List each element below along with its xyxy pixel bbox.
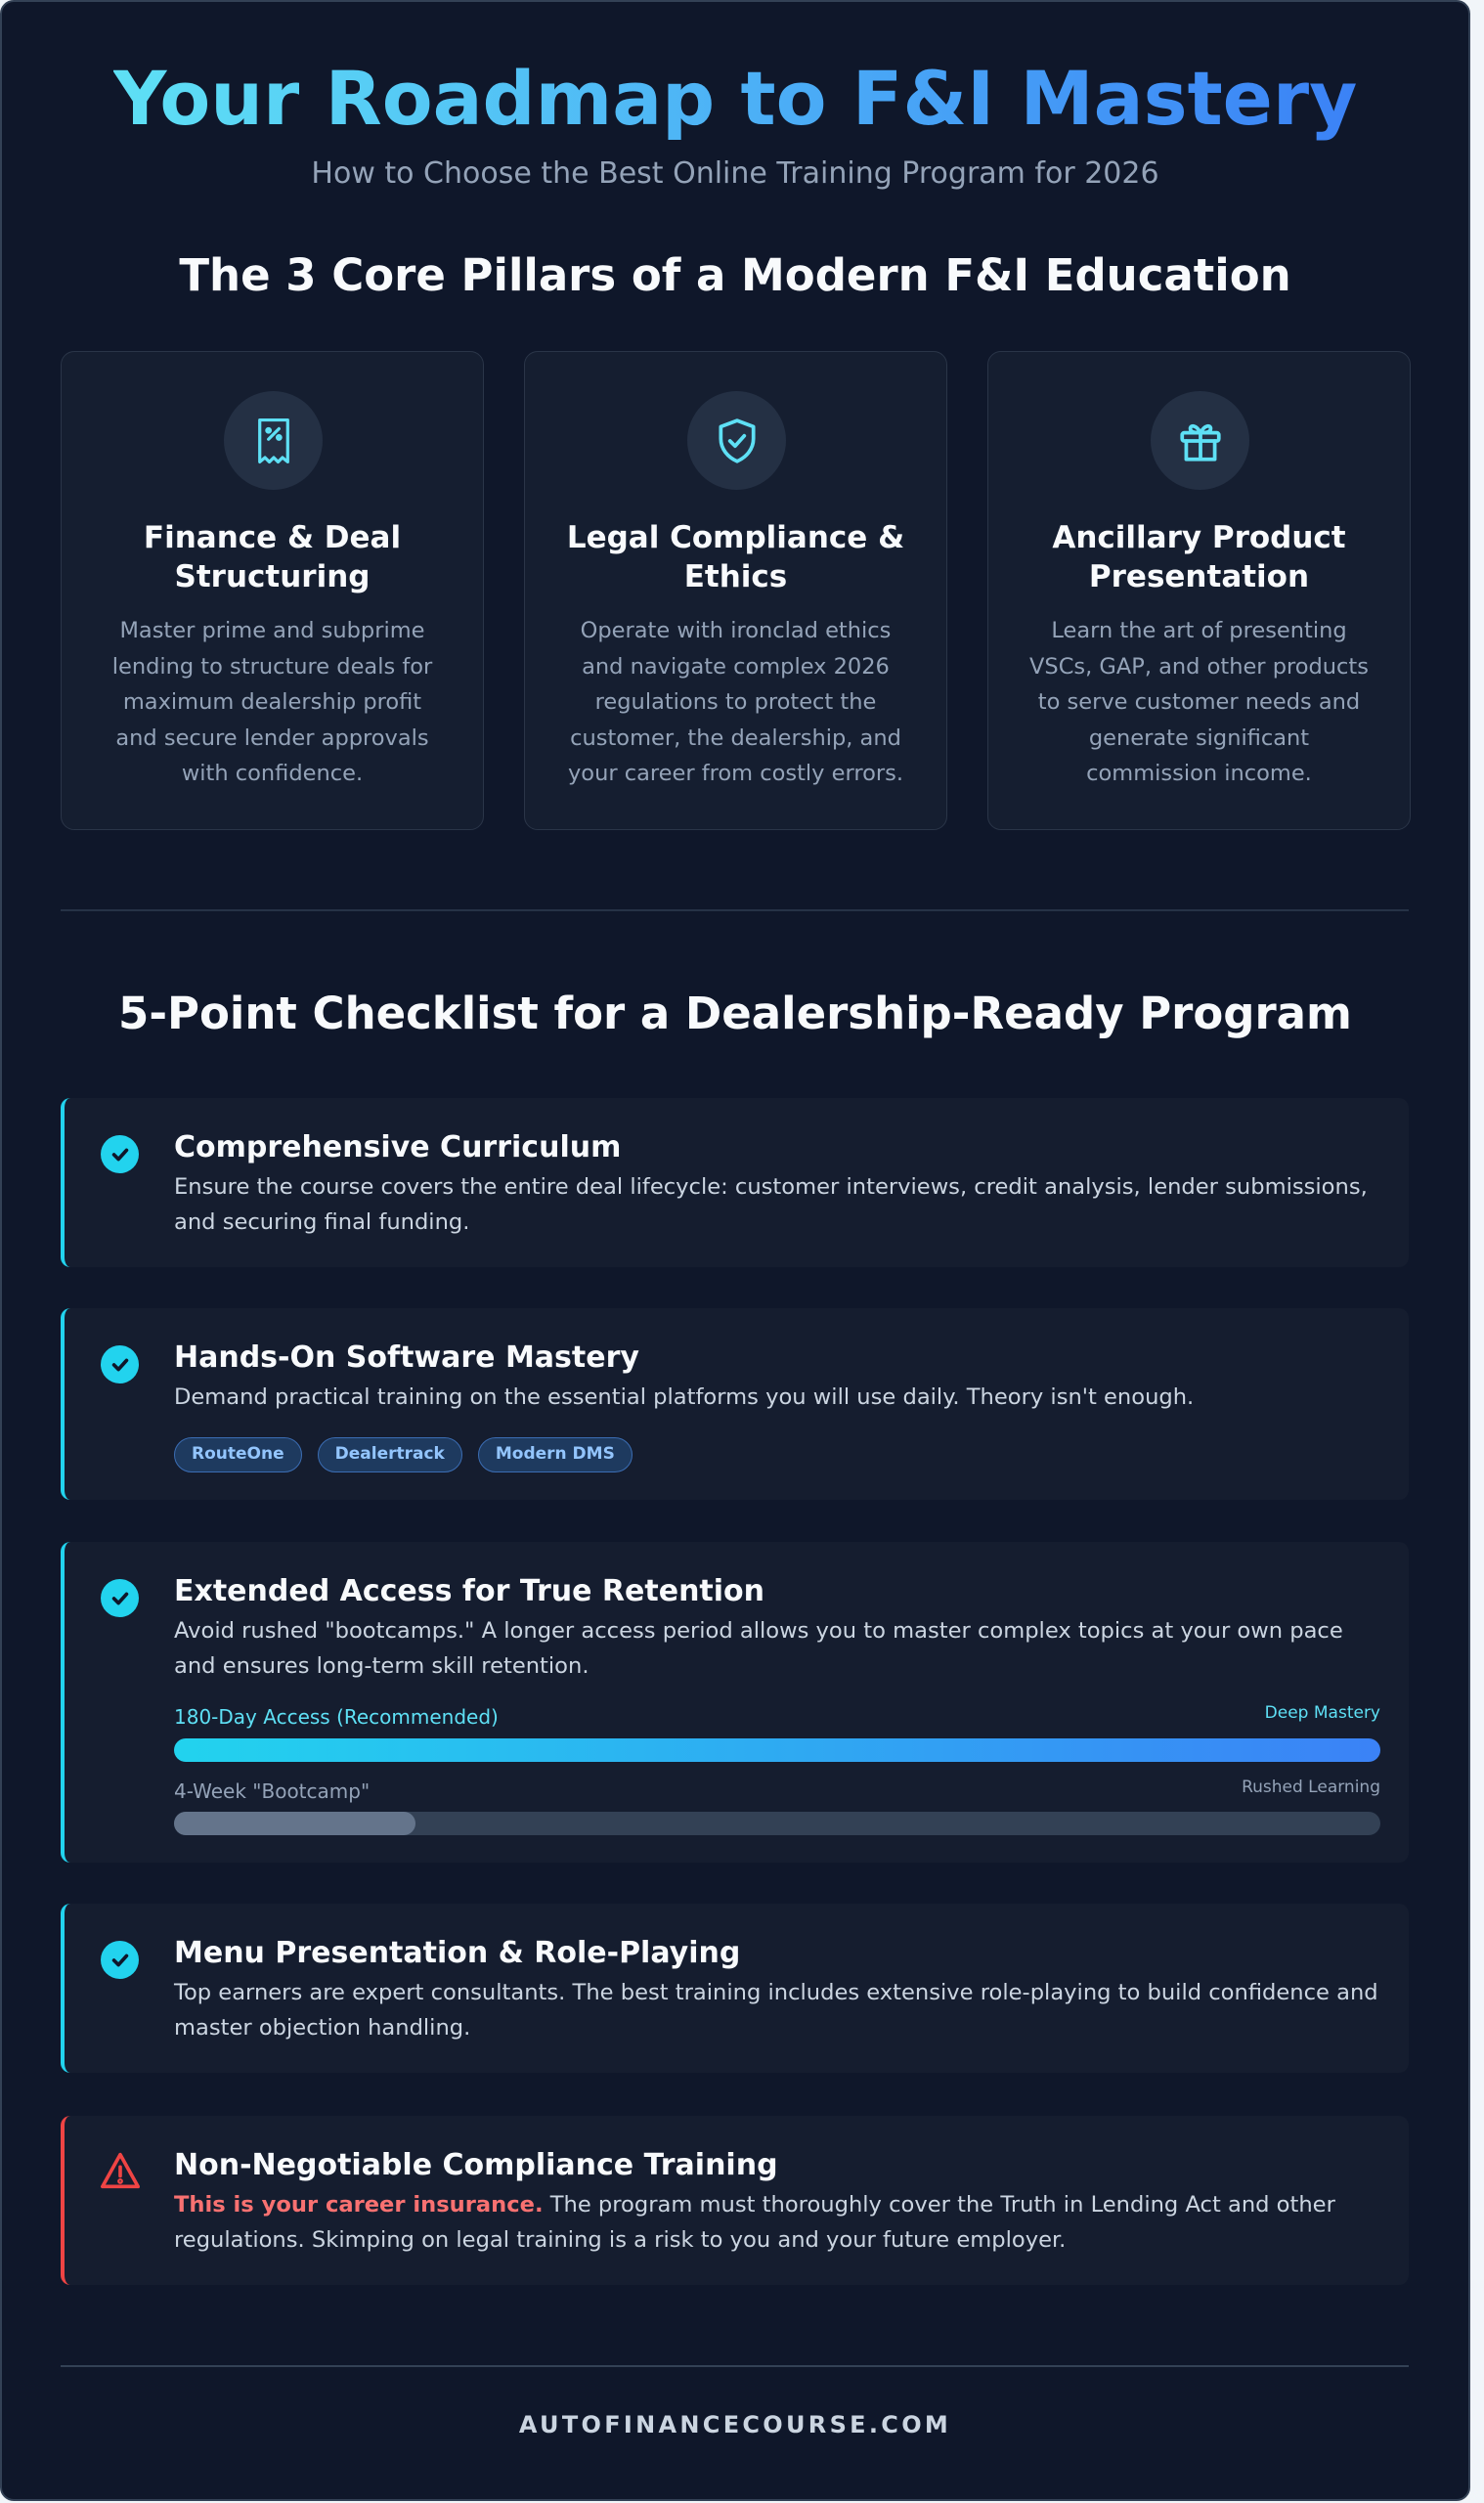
item 5: compliance warning: This is your career insurance. The program must thoroughly cover the Truth in Lending Act and other regulations. Skimping on legal training is a risk to you and your future employer.	[174, 2192, 1335, 2253]
item 3	[61, 1542, 1409, 1863]
footer: AUTOFINANCECOURSE.COM	[519, 2411, 951, 2438]
subtitle: How to Choose the Best Online Training Program for 2026	[311, 156, 1159, 191]
item 4: Menu Presentation & Role-Playing	[174, 1936, 740, 1970]
item 5: compliance warning: Non-Negotiable Compliance Training	[174, 2148, 778, 2182]
panel: legal pillar: Ethics	[684, 559, 787, 594]
panel: ancillary pillar: Learn the art of presenting VSCs, GAP, and other products to serve customer needs and generate significant commission income.	[1029, 618, 1369, 786]
icon: check	[101, 1345, 139, 1383]
item 1: Comprehensive Curriculum	[174, 1130, 621, 1164]
bar chart: access comparison: 180-Day Access (Recommended)	[174, 1705, 499, 1729]
software tags: RouteOne	[192, 1444, 284, 1464]
item 2: Demand practical training on the essential platforms you will use daily. Theory isn't enough.	[174, 1384, 1194, 1410]
item 2: Hands-On Software Mastery	[174, 1340, 639, 1375]
icon: warning	[100, 2153, 140, 2188]
panel: ancillary pillar: Presentation	[1089, 559, 1309, 594]
item 3: Extended Access for True Retention	[174, 1574, 764, 1608]
panel: finance pillar: Structuring	[175, 559, 370, 594]
panel: finance pillar	[61, 351, 484, 830]
title: Your Roadmap to F&I Mastery	[113, 56, 1357, 142]
heading: checklist: 5-Point Checklist for a Dealership-Ready Program	[118, 988, 1352, 1039]
bar chart: access comparison: Rushed Learning	[1242, 1778, 1380, 1797]
item 2	[61, 1308, 1409, 1500]
item 3: Avoid rushed "bootcamps." A longer access period allows you to master complex topics at your own pace and ensures long-term skill retention.	[174, 1618, 1343, 1679]
item 4	[61, 1904, 1409, 2073]
item 4: Top earners are expert consultants. The best training includes extensive role-playing to build confidence and master objection handling.	[174, 1980, 1378, 2041]
panel: legal pillar: Legal Compliance &	[567, 520, 904, 555]
icon: shield check	[687, 391, 786, 490]
icon: check	[101, 1135, 139, 1173]
software tags	[174, 1437, 633, 1472]
panel: finance pillar: Finance & Deal	[144, 520, 401, 555]
bar chart: access comparison: Deep Mastery	[1265, 1703, 1380, 1723]
software tags: Modern DMS	[496, 1444, 615, 1464]
icon: gift	[1151, 391, 1249, 490]
software tags: Dealertrack	[335, 1444, 445, 1464]
panel: legal pillar	[524, 351, 947, 830]
icon: receipt percent	[224, 391, 323, 490]
icon: check	[101, 1579, 139, 1617]
bar chart: access comparison: 4-Week "Bootcamp"	[174, 1779, 370, 1803]
heading: pillars: The 3 Core Pillars of a Modern F&I Education	[179, 249, 1291, 301]
item 5: compliance warning	[61, 2116, 1409, 2285]
panel: ancillary pillar: Ancillary Product	[1052, 520, 1346, 555]
item 1: Ensure the course covers the entire deal lifecycle: customer interviews, credit analysis, lender submissions, and securing final funding.	[174, 1174, 1368, 1235]
icon: check	[101, 1941, 139, 1979]
item 1	[61, 1098, 1409, 1267]
bar chart: access comparison	[174, 1703, 1380, 1835]
panel: legal pillar: Operate with ironclad ethics and navigate complex 2026 regulations to protect the customer, the dealership, and your career from costly errors.	[568, 618, 903, 786]
panel: ancillary pillar	[987, 351, 1411, 830]
panel: finance pillar: Master prime and subprime lending to structure deals for maximum dealership profit and secure lender approvals with confidence.	[112, 618, 432, 786]
